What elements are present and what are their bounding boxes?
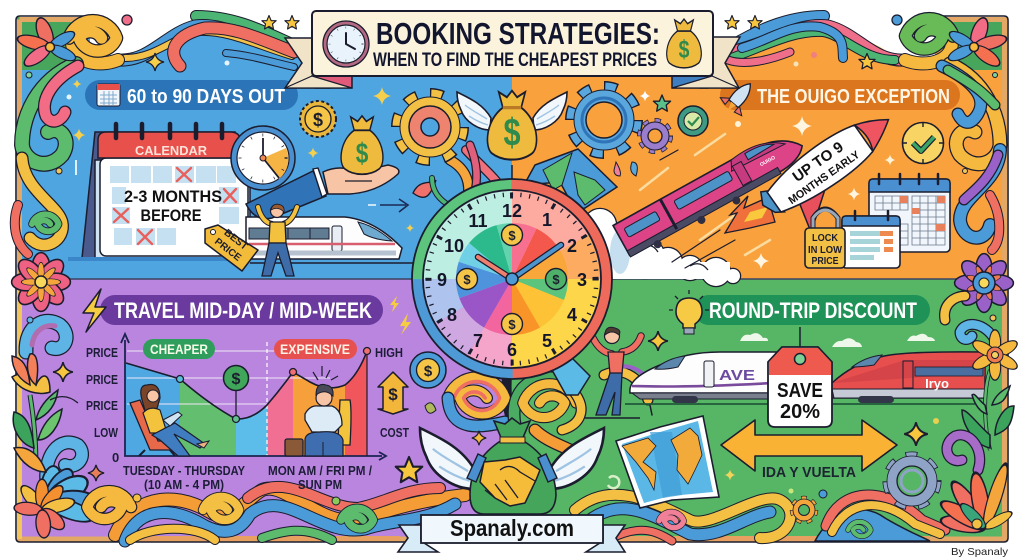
cuffs bbox=[467, 454, 557, 482]
speed lines bbox=[640, 134, 770, 268]
axis labels: TUESDAY - THURSDAY bbox=[123, 463, 245, 478]
panel: round-trip discount (green) bbox=[512, 279, 1007, 541]
credit: By Spanaly bbox=[951, 546, 1009, 558]
chart curve bbox=[126, 351, 367, 419]
gear: orange small bbox=[792, 498, 816, 522]
calendar label: CALENDAR bbox=[135, 144, 207, 158]
clock numbers: 6 bbox=[507, 340, 517, 360]
icon: money bag: $ bbox=[356, 139, 368, 170]
icon: green check badge bbox=[678, 106, 708, 136]
AVE logo text: AVE bbox=[719, 367, 755, 384]
center bottom handshake bag bbox=[420, 418, 604, 514]
train: Iryo bbox=[830, 352, 985, 403]
label: expensive bbox=[274, 339, 357, 359]
price chart bbox=[86, 334, 409, 492]
icon: money bag bbox=[341, 116, 383, 174]
flower: left middle bbox=[12, 253, 70, 311]
double arrow: ida y vuelta: IDA Y VUELTA bbox=[762, 464, 856, 481]
flower: right middle bbox=[955, 254, 1013, 312]
ornament: top-left ribbons bbox=[69, 15, 299, 71]
calendar text: 2-3 MONTHS bbox=[124, 187, 222, 206]
icon: green bag bbox=[470, 418, 556, 514]
gear: purple bbox=[640, 121, 670, 151]
label: expensive: EXPENSIVE bbox=[280, 342, 350, 357]
rocket bbox=[753, 103, 916, 246]
axis labels: PRICE bbox=[86, 345, 118, 360]
hand holding money bbox=[246, 116, 399, 219]
heading pill: round-trip discount bbox=[669, 290, 930, 334]
train: pink Ouigo train: OUIGO bbox=[759, 155, 777, 168]
price tag: best price: BEST bbox=[222, 227, 249, 253]
icon: small rocket bbox=[717, 75, 761, 120]
train: AVE bbox=[630, 352, 790, 403]
chart colored areas bbox=[126, 351, 367, 456]
banner: Spanaly.com: Spanaly.com bbox=[450, 515, 574, 541]
chart axes bbox=[121, 334, 386, 460]
clock face sectors bbox=[451, 218, 573, 340]
panel: the Ouigo exception (orange) bbox=[512, 17, 1007, 279]
flower: top right bbox=[946, 16, 1008, 70]
small lightning bolts bbox=[390, 296, 411, 335]
axis labels: LOW bbox=[94, 425, 119, 440]
clock coins bbox=[456, 224, 566, 334]
icon: check circle bbox=[885, 122, 944, 165]
clock coins: $ bbox=[552, 272, 560, 287]
axis labels: 0 bbox=[112, 450, 119, 465]
axis labels: PRICE bbox=[86, 398, 118, 413]
icon: money bag bbox=[667, 19, 701, 68]
clock numbers: 1 bbox=[542, 210, 552, 230]
decor: green star and droplets bbox=[614, 91, 741, 176]
ornament: bottom ribbons purple panel bbox=[87, 487, 465, 541]
calendar: BEFORE bbox=[140, 206, 202, 225]
heading pill: travel mid-day mid-week bbox=[83, 289, 383, 332]
Iryo logo text: Iryo bbox=[925, 376, 949, 391]
flame core bbox=[744, 207, 768, 222]
train: white train bbox=[246, 217, 420, 263]
track bbox=[625, 403, 975, 405]
stars: purple center bbox=[396, 403, 486, 482]
calendars: front calendar bbox=[842, 211, 900, 268]
icon: money bag: $ bbox=[503, 111, 521, 154]
heading text: ROUND-TRIP DISCOUNT bbox=[709, 298, 917, 323]
clock bbox=[412, 179, 612, 379]
icon: padlock bbox=[805, 209, 845, 268]
title text: BOOKING STRATEGIES: bbox=[376, 16, 660, 51]
icon: coin with ring bbox=[410, 352, 446, 388]
clock numbers: 12 bbox=[502, 201, 522, 221]
gear: yellow bbox=[397, 94, 463, 160]
calendars: back calendar bbox=[869, 174, 950, 252]
icon: padlock: LOCK bbox=[812, 232, 838, 244]
icon: coin: $ bbox=[313, 110, 323, 130]
flower: right small orange bbox=[970, 330, 1020, 380]
price tag: best price bbox=[205, 225, 258, 271]
clock numbers: 8 bbox=[447, 305, 457, 325]
flower: bottom right bbox=[938, 462, 1014, 535]
axis labels: HIGH bbox=[375, 345, 403, 360]
price tag: best price: PRICE bbox=[212, 236, 243, 264]
man stressed in chair bbox=[285, 366, 351, 456]
axis labels bbox=[86, 345, 409, 492]
panel divider line bbox=[70, 278, 965, 280]
person waving bbox=[585, 327, 641, 418]
price tag: save 20%: SAVE bbox=[777, 380, 823, 402]
clock hands bbox=[478, 245, 561, 285]
corner block: top right green bbox=[938, 17, 1007, 70]
ornament: bottom ribbons green panel bbox=[575, 495, 945, 541]
pin: dollar: $ bbox=[232, 371, 241, 388]
clock coins: $ bbox=[508, 317, 516, 332]
corner block: top left green bbox=[17, 17, 85, 70]
star: green panel bbox=[648, 331, 668, 351]
panel: 60 to 90 days out (blue) bbox=[17, 17, 512, 279]
clock numbers: 4 bbox=[567, 305, 577, 325]
sparkles: orange panel bbox=[753, 116, 860, 269]
clock numbers: 7 bbox=[473, 331, 483, 351]
ornament: right column ribbons (orange panel) bbox=[942, 64, 1000, 250]
icon: alarm clock bbox=[231, 126, 295, 190]
rocket: MONTHS EARLY bbox=[786, 149, 863, 207]
calendar crosses bbox=[114, 168, 236, 244]
clock ring bbox=[418, 184, 606, 374]
world map bbox=[616, 416, 719, 508]
icon: calendar bbox=[97, 84, 120, 106]
heading pill: the Ouigo exception bbox=[717, 75, 960, 120]
woman relaxing in chair bbox=[130, 385, 209, 456]
icon: padlock: IN LOW bbox=[808, 244, 842, 256]
heading text: 60 to 90 DAYS OUT bbox=[127, 86, 285, 108]
price tag: save 20%: 20% bbox=[780, 401, 820, 423]
icon: light bulb bbox=[669, 290, 709, 334]
chart gridlines bbox=[127, 351, 330, 404]
flame bbox=[725, 196, 775, 233]
heading text: THE OUIGO EXCEPTION bbox=[757, 86, 950, 108]
stars: green panel lower bbox=[725, 418, 939, 498]
label: cheaper: CHEAPER bbox=[150, 342, 208, 357]
sparkles: blue panel bbox=[308, 87, 414, 232]
clock wheel wedges bbox=[473, 240, 551, 318]
rocket: UP TO 9 bbox=[789, 139, 847, 186]
swirl: small white bbox=[608, 476, 619, 488]
wings: top bbox=[457, 92, 491, 130]
chart dots bbox=[176, 348, 370, 422]
calendar cells bbox=[110, 166, 239, 245]
axis labels: PRICE bbox=[86, 372, 118, 387]
double arrow: ida y vuelta bbox=[721, 420, 897, 481]
panel: travel mid-day mid-week (purple) bbox=[17, 279, 512, 541]
clock numbers bbox=[437, 201, 587, 360]
icon: lightning bolt bbox=[83, 289, 106, 332]
clock numbers: 10 bbox=[444, 236, 464, 256]
clock ticks bbox=[428, 194, 596, 364]
icon: money bag: $ bbox=[679, 35, 690, 63]
axis labels: MON AM / FRI PM / bbox=[268, 463, 372, 478]
person holding arms up bbox=[258, 204, 297, 276]
clock numbers: 11 bbox=[468, 211, 488, 231]
gear: gray bbox=[886, 455, 938, 507]
title banner bbox=[285, 11, 740, 88]
ribbon tail: right bbox=[672, 37, 740, 88]
ornament: left column (purple panel) bbox=[12, 317, 104, 487]
heading text: TRAVEL MID-DAY / MID-WEEK bbox=[114, 298, 372, 323]
heading pill: 60 to 90 days out bbox=[85, 80, 298, 110]
icon: padlock: PRICE bbox=[812, 255, 838, 267]
wings: bottom bbox=[420, 428, 474, 489]
arrow: to clock bbox=[368, 199, 408, 212]
banner: Spanaly.com bbox=[398, 515, 625, 552]
train: pink Ouigo train bbox=[612, 125, 812, 262]
axis labels: COST bbox=[380, 425, 409, 440]
ornament: right column green panel bbox=[945, 296, 1014, 470]
gear: blue bbox=[571, 87, 637, 153]
clock coins: $ bbox=[463, 272, 471, 287]
center bag with wings bbox=[457, 91, 567, 160]
flower: bottom left blue and orange bbox=[14, 464, 96, 539]
clock numbers: 9 bbox=[437, 270, 447, 290]
calendar rings bbox=[116, 124, 222, 138]
calendar shadow line bbox=[68, 257, 250, 261]
label: cheaper bbox=[143, 339, 215, 359]
icon: wall clock bbox=[323, 21, 369, 67]
flower: top left bbox=[16, 16, 78, 70]
icon: up-down cost arrows: $ bbox=[388, 385, 398, 404]
map: behind clock bbox=[524, 149, 617, 210]
ribbon tail: left bbox=[285, 38, 352, 88]
ornament: top center flourish bbox=[413, 145, 512, 206]
subtitle text: WHEN TO FIND THE CHEAPEST PRICES bbox=[373, 50, 657, 71]
clock numbers: 2 bbox=[567, 236, 577, 256]
cloud: smoke trail bbox=[584, 209, 740, 286]
clock numbers: 3 bbox=[577, 270, 587, 290]
clock coins: $ bbox=[508, 228, 516, 243]
pin: dollar bbox=[224, 366, 248, 416]
price tag: save 20% bbox=[768, 327, 832, 427]
calendar bbox=[82, 124, 250, 258]
icon: handshake bbox=[480, 457, 540, 506]
ornament: left column ribbons (blue panel) bbox=[15, 64, 85, 254]
ornament: bottom-left leaf bbox=[14, 447, 46, 472]
ornament: top-right ribbons bbox=[725, 15, 953, 69]
clock numbers: 5 bbox=[542, 331, 552, 351]
axis labels: (10 AM - 4 PM) bbox=[144, 477, 224, 492]
clouds: green panel bbox=[740, 333, 935, 347]
icon: up-down cost arrows bbox=[378, 372, 408, 414]
axis labels: SUN PM bbox=[298, 477, 342, 492]
icon: coin bbox=[300, 101, 336, 137]
ornament: center flourishes below clock bbox=[448, 358, 652, 450]
icon: coin with ring: $ bbox=[424, 363, 433, 380]
